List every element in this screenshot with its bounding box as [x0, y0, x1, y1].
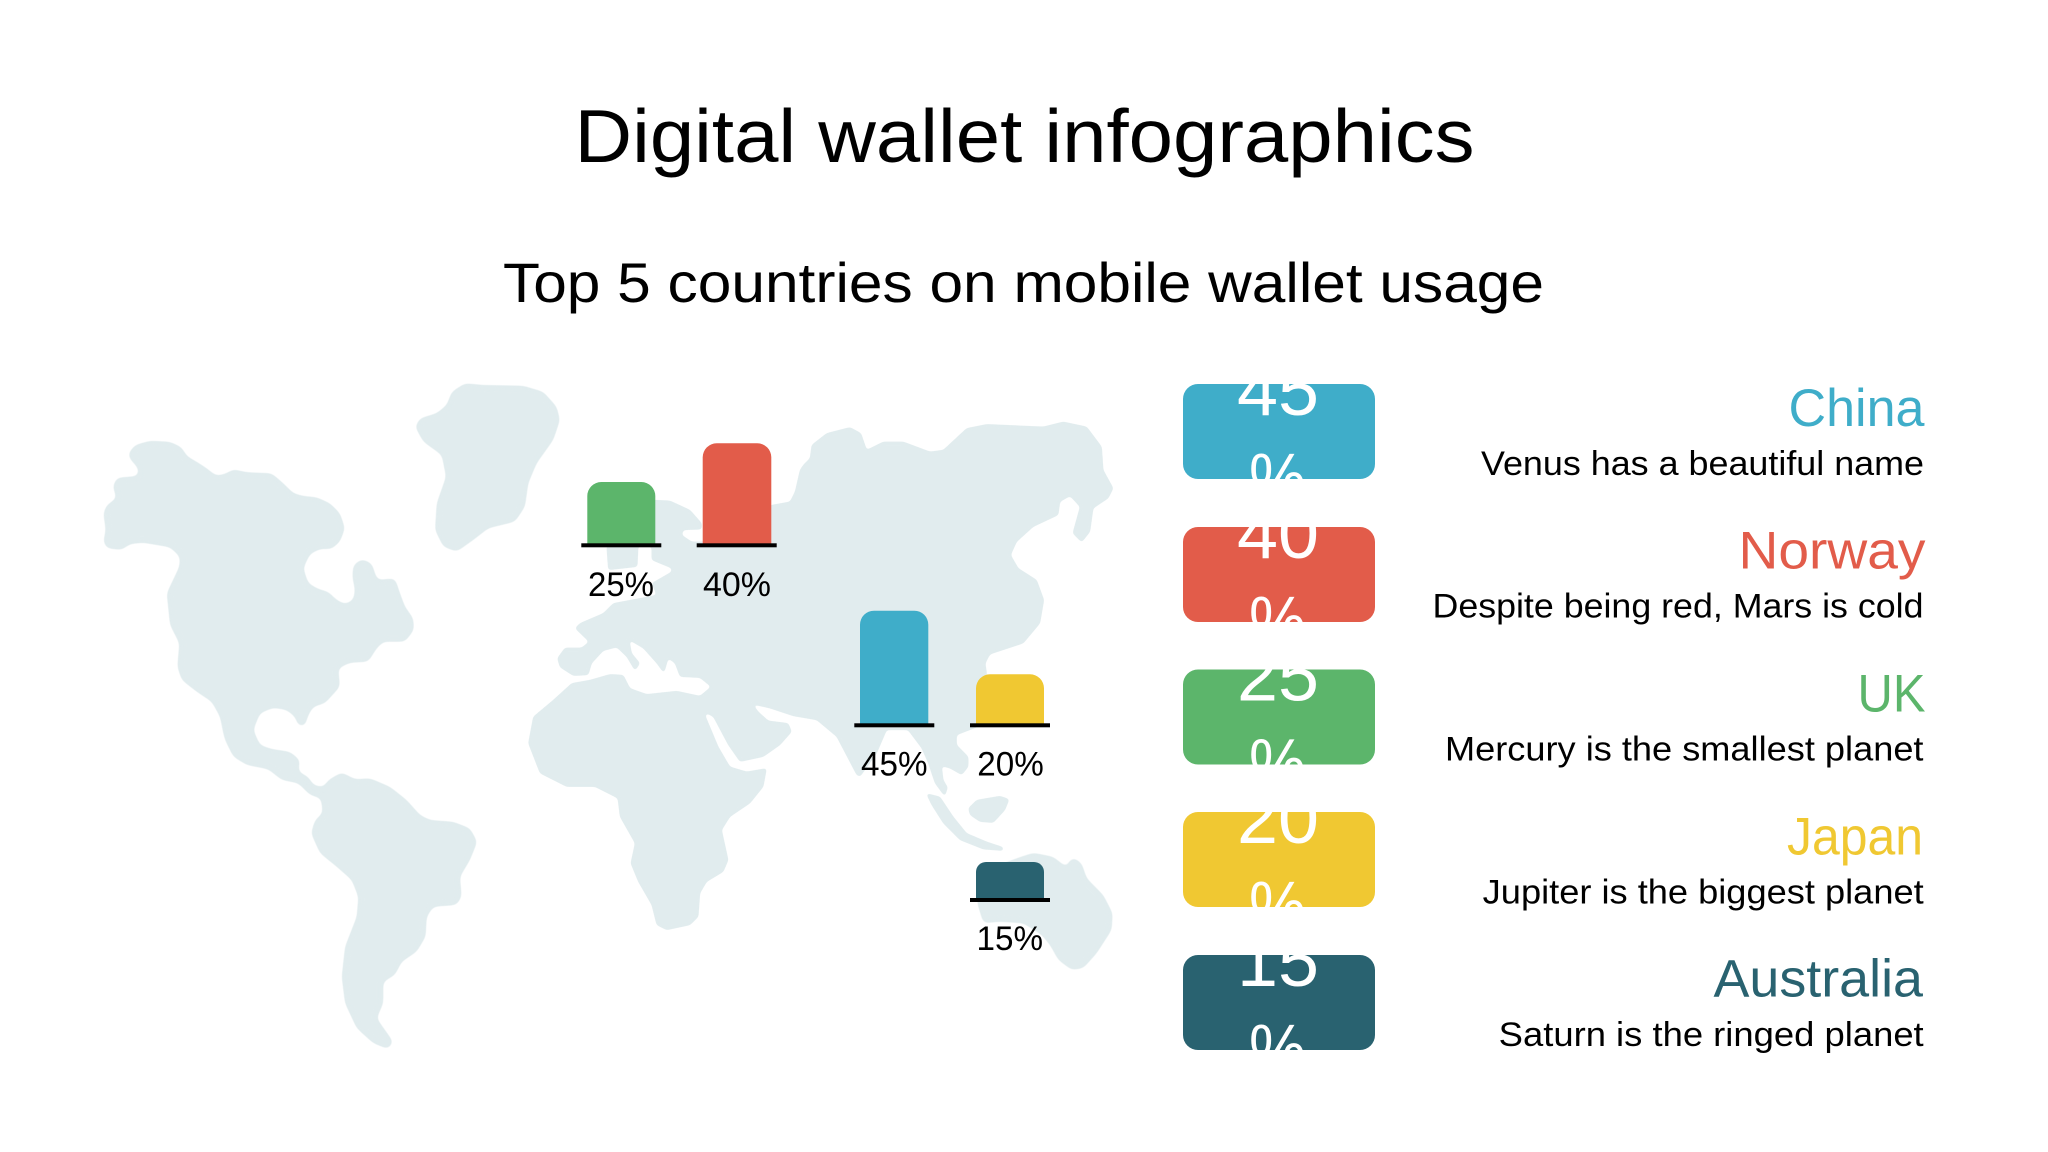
label: Australia — [1499, 950, 1924, 1054]
bar: UK 25% — [581, 482, 661, 604]
card: Norway 40%: 40 — [1237, 495, 1319, 574]
card: Australia 15%: % — [1249, 1011, 1306, 1090]
label: China — [1481, 379, 1925, 483]
continent: Eurasia and Africa — [528, 422, 1113, 930]
card: China 45% — [1183, 352, 1375, 519]
label: Japan — [1483, 807, 1924, 911]
bar: Australia 15%: 15% — [976, 920, 1043, 958]
bar: China 45%: 45% — [861, 746, 928, 784]
label: China: China — [1788, 379, 1925, 438]
bar: Japan 20%: 20% — [977, 746, 1044, 784]
card: China 45%: % — [1249, 440, 1306, 519]
card: UK 25%: % — [1249, 726, 1306, 804]
subtitle: Top 5 countries on mobile wallet usage — [503, 251, 1544, 314]
bar: Japan 20% — [970, 674, 1050, 784]
label: Norway: Norway — [1738, 521, 1926, 580]
label: Australia: Saturn is the ringed planet — [1499, 1016, 1924, 1054]
bar: Australia 15% — [970, 862, 1050, 958]
continent: Australia — [977, 853, 1113, 970]
label: UK: Mercury is the smallest planet — [1445, 731, 1924, 769]
continent: North and South America — [103, 441, 477, 1049]
continent: Greenland — [415, 383, 560, 552]
card: Japan 20%: 20 — [1237, 780, 1319, 859]
bar: Norway 40% — [697, 443, 777, 604]
card: China 45%: 45 — [1237, 352, 1319, 431]
bar: UK 25%: 25% — [588, 566, 654, 604]
card: Norway 40% — [1183, 495, 1375, 662]
card: Australia 15%: 15 — [1237, 923, 1319, 1002]
card: UK 25% — [1183, 638, 1375, 804]
label: UK: UK — [1858, 665, 1926, 724]
label: Japan: Japan — [1787, 807, 1923, 866]
label: Australia: Australia — [1714, 950, 1924, 1009]
label: Norway — [1432, 521, 1926, 626]
label: Japan: Jupiter is the biggest planet — [1483, 873, 1924, 911]
label: China: Venus has a beautiful name — [1481, 445, 1924, 483]
label: Norway: Despite being red, Mars is cold — [1432, 588, 1924, 626]
bar: China 45% — [854, 611, 934, 784]
island: Borneo — [968, 796, 1009, 823]
title: Digital wallet infographics — [574, 94, 1474, 178]
label: UK — [1445, 665, 1926, 769]
bar: Norway 40%: 40% — [703, 566, 771, 604]
card: UK 25%: 25 — [1237, 638, 1319, 716]
card: Australia 15% — [1183, 923, 1375, 1090]
card: Japan 20% — [1183, 780, 1375, 947]
card: Norway 40%: % — [1249, 583, 1306, 662]
world map — [103, 383, 1113, 1049]
card: Japan 20%: % — [1249, 868, 1306, 947]
island: Indonesia — [926, 793, 1003, 851]
